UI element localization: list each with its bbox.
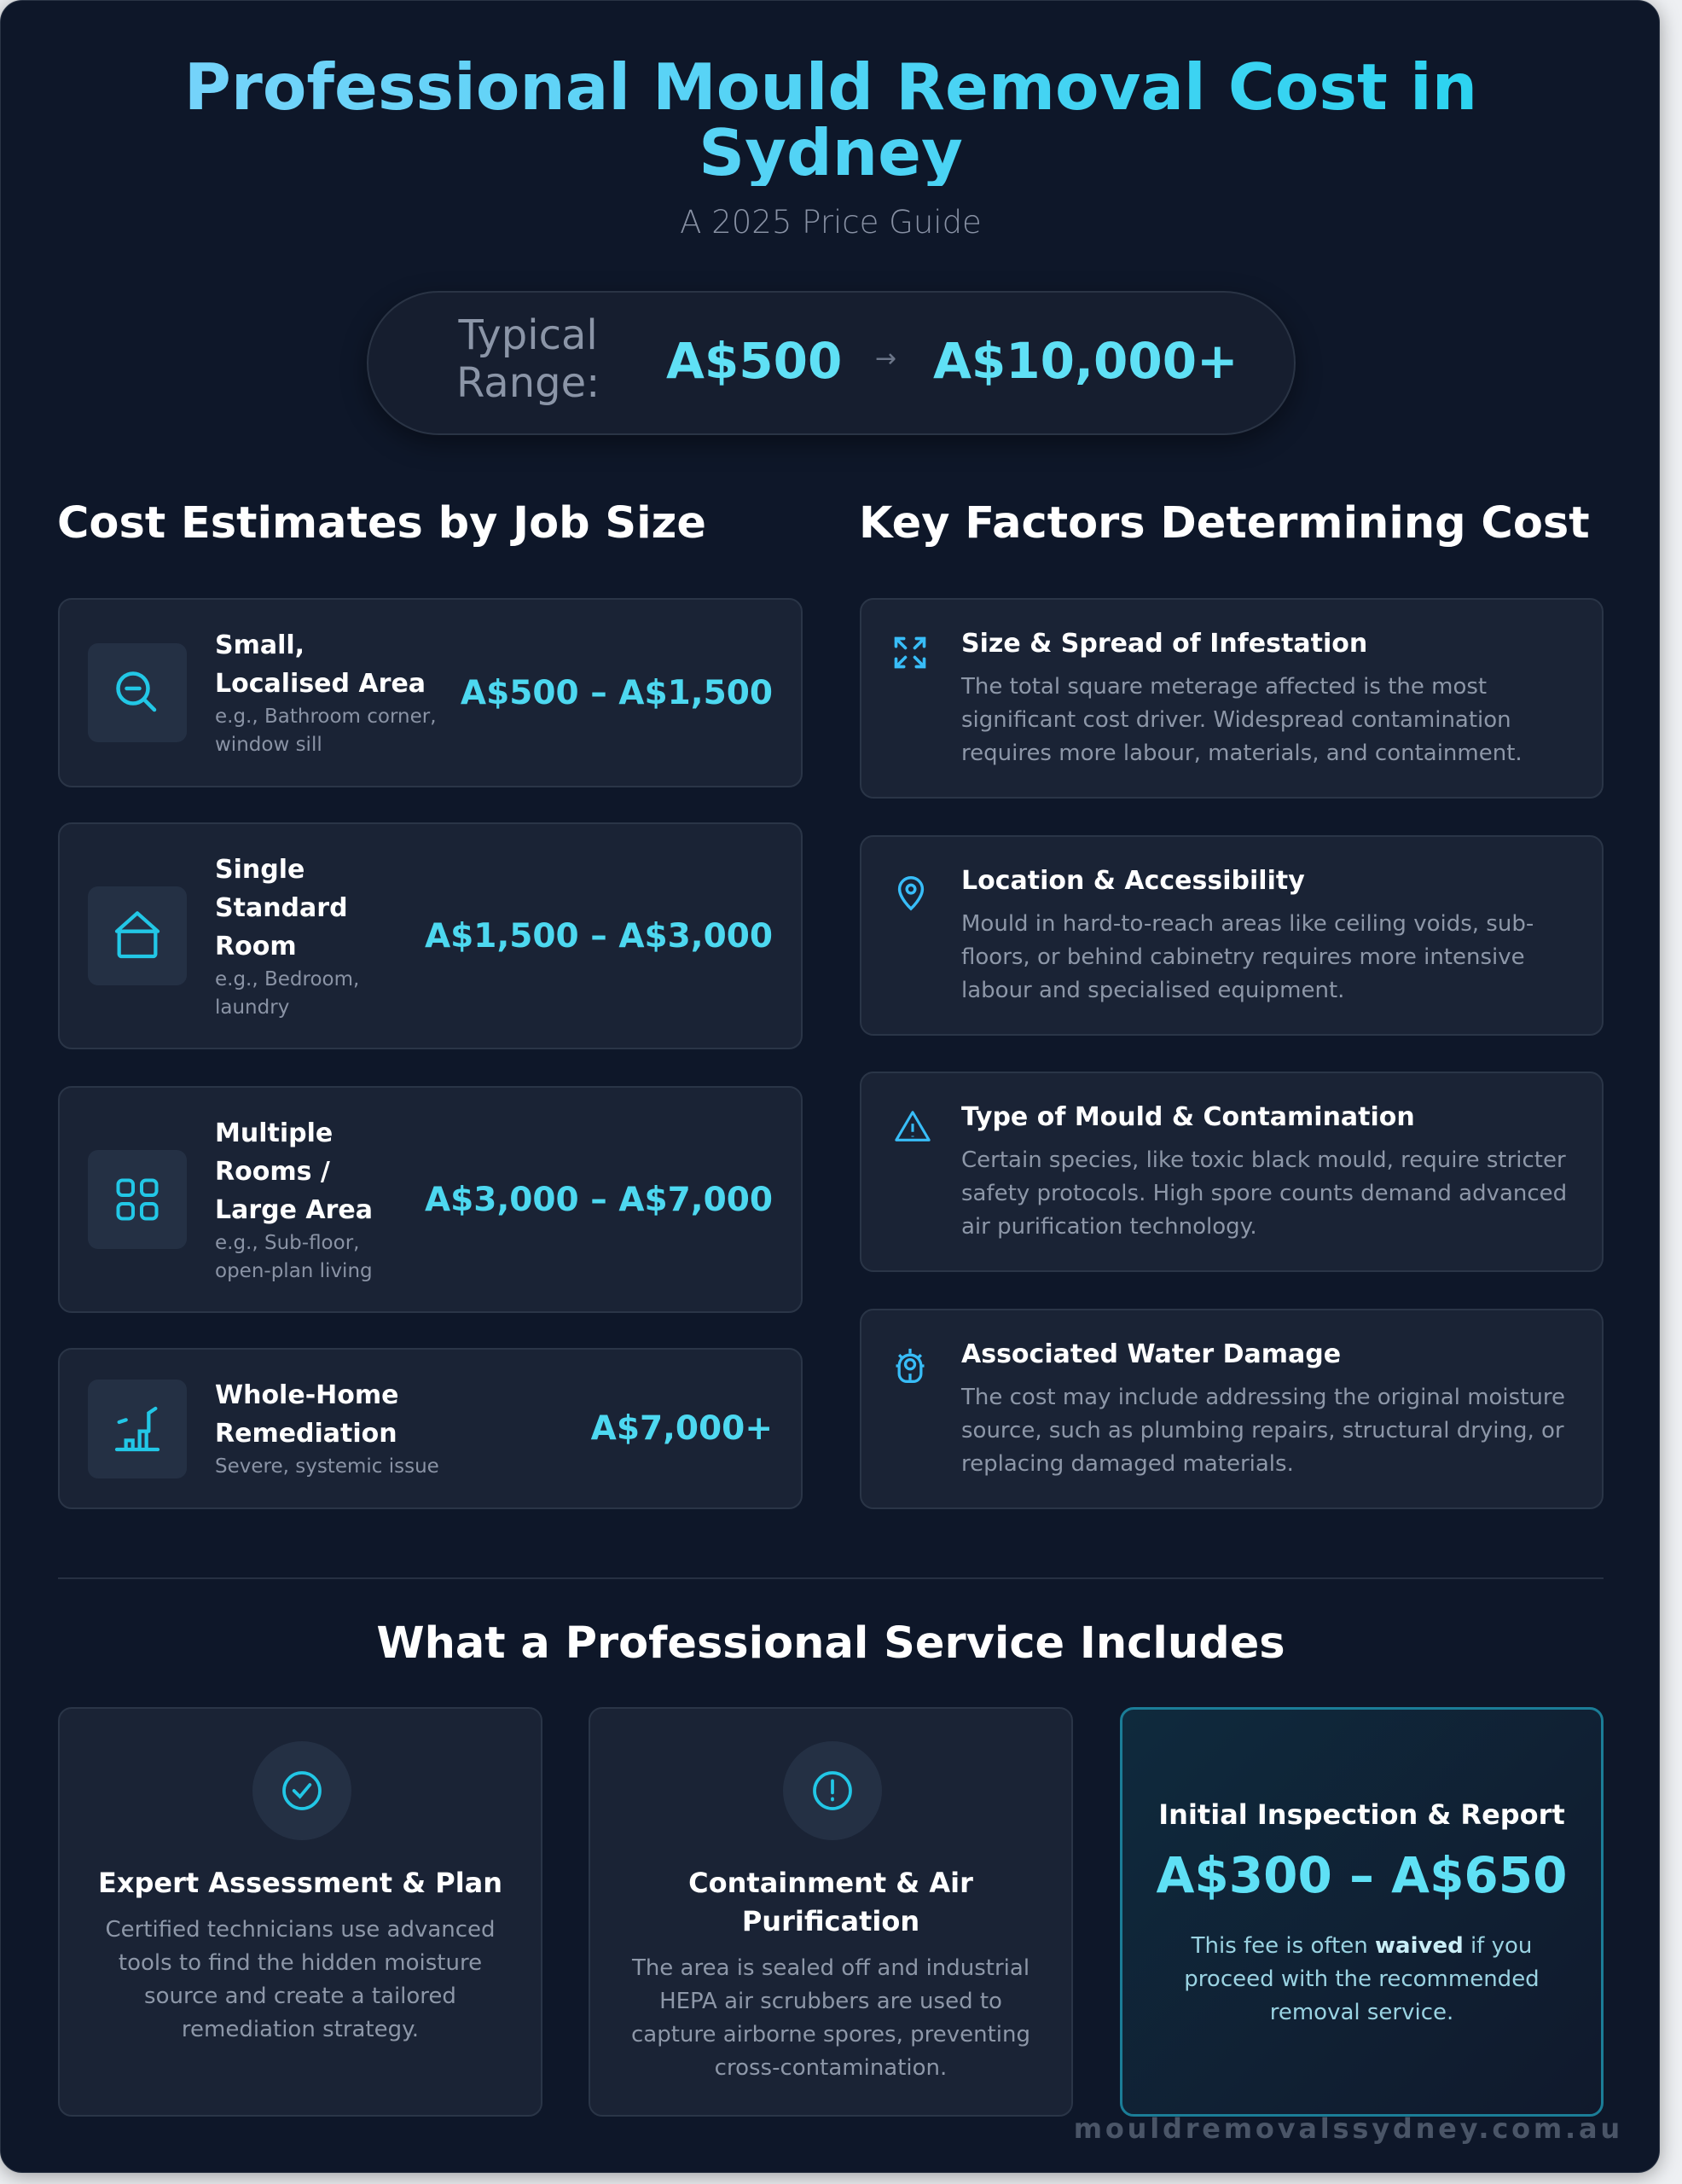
price: A$500 – A$1,500 [461, 674, 773, 712]
range label: Typical [459, 311, 598, 359]
text: e.g., Sub-floor, [215, 1232, 359, 1254]
factor: size & spread: The total square meterage affected is the most significant cost driver. Widespread contamination requires more labour, materials, and containment. [961, 674, 1522, 766]
icon: alert [783, 1741, 882, 1840]
price: A$1,500 – A$3,000 [425, 916, 773, 956]
inspection price: A$300 – A$650 [1156, 1846, 1568, 1904]
text: Small, [215, 630, 304, 660]
range max: A$10,000+ [933, 332, 1238, 390]
range label: Range: [456, 359, 600, 407]
factor: size & spread: Size & Spread of Infestation [961, 629, 1367, 659]
text: Room [215, 932, 297, 961]
card: inspection fee [1120, 1707, 1604, 2117]
text: laundry [215, 996, 289, 1019]
text [215, 630, 437, 756]
text [215, 1118, 373, 1281]
icon: warning [895, 1111, 931, 1141]
text: e.g., Bedroom, [215, 967, 359, 990]
text [215, 1380, 439, 1478]
inspection note: This fee is often waived if you proceed with the recommended removal service. [1184, 1933, 1540, 2025]
icon: bug [896, 1348, 925, 1383]
inspection title: Initial Inspection & Report [1158, 1798, 1565, 1831]
range label [456, 311, 600, 407]
factor: water damage [860, 1309, 1604, 1509]
card: single room [58, 822, 803, 1049]
text: open-plan living [215, 1259, 373, 1281]
title [1, 55, 1661, 186]
text: Rooms / [215, 1157, 330, 1186]
text: Severe, systemic issue [215, 1455, 439, 1478]
card: containment: The area is sealed off and industrial HEPA air scrubbers are used to capture airborne spores, preventing cross-contamination. [631, 1955, 1030, 2081]
factor: type: Type of Mould & Contamination [961, 1102, 1415, 1132]
heading: cost estimates: Cost Estimates by Job Size [57, 498, 706, 549]
icon: house [88, 886, 187, 985]
text: Whole-Home [215, 1380, 398, 1410]
card: multiple rooms [58, 1086, 803, 1313]
title: Professional Mould Removal Cost in [184, 49, 1477, 125]
card: containment: Containment & Air [688, 1867, 973, 1899]
icon: check [252, 1741, 351, 1840]
card: whole home [58, 1348, 803, 1509]
card: small area [58, 598, 803, 787]
card: expert assessment: Certified technicians use advanced tools to find the hidden moisture source and create a tailored remediation strategy. [105, 1917, 496, 2042]
icon: zoom out [88, 643, 187, 742]
icon: expand [894, 636, 926, 669]
icon: chart [88, 1379, 187, 1478]
price: A$7,000+ [591, 1409, 773, 1448]
factor: location [860, 835, 1604, 1036]
text: Multiple [215, 1118, 333, 1148]
footer url: mouldremovalssydney.com.au [1074, 2112, 1623, 2145]
text: Single [215, 855, 304, 884]
text: window sill [215, 734, 322, 756]
title: Sydney [699, 115, 963, 190]
text [215, 855, 359, 1019]
card: containment [589, 1707, 1073, 2117]
card: expert assessment: Expert Assessment & Plan [98, 1867, 502, 1899]
factor: location: Mould in hard-to-reach areas like ceiling voids, sub-floors, or behind cabinetry requires more intensive labour and specialised equipment. [961, 911, 1534, 1003]
price: A$3,000 – A$7,000 [425, 1181, 773, 1218]
typical range pill [367, 291, 1296, 435]
factor: location: Location & Accessibility [961, 866, 1305, 896]
icon: grid [88, 1150, 187, 1249]
range min: A$500 [666, 332, 842, 390]
factor: size & spread [860, 598, 1604, 799]
arrow: → [875, 344, 896, 374]
icon: pin [897, 876, 925, 911]
text: Standard [215, 892, 348, 923]
text: Large Area [215, 1194, 373, 1225]
text: Remediation [215, 1419, 397, 1449]
factor: water damage: Associated Water Damage [961, 1339, 1341, 1369]
factor: water damage: The cost may include addressing the original moisture source, such as plumbing repairs, structural drying, or replacing damaged materials. [961, 1385, 1565, 1477]
text: e.g., Bathroom corner, [215, 706, 437, 728]
heading: service includes: What a Professional Service Includes [376, 1618, 1285, 1669]
text: Localised Area [215, 669, 426, 699]
factor: type [860, 1072, 1604, 1272]
card: expert assessment [58, 1707, 542, 2117]
heading: key factors: Key Factors Determining Cost [859, 498, 1590, 549]
divider [58, 1577, 1604, 1579]
factor: type: Certain species, like toxic black mould, require stricter safety protocols. High spore counts demand advanced air purification technology. [961, 1147, 1567, 1240]
subtitle: A 2025 Price Guide [680, 204, 982, 241]
card: containment: Purification [742, 1905, 919, 1937]
